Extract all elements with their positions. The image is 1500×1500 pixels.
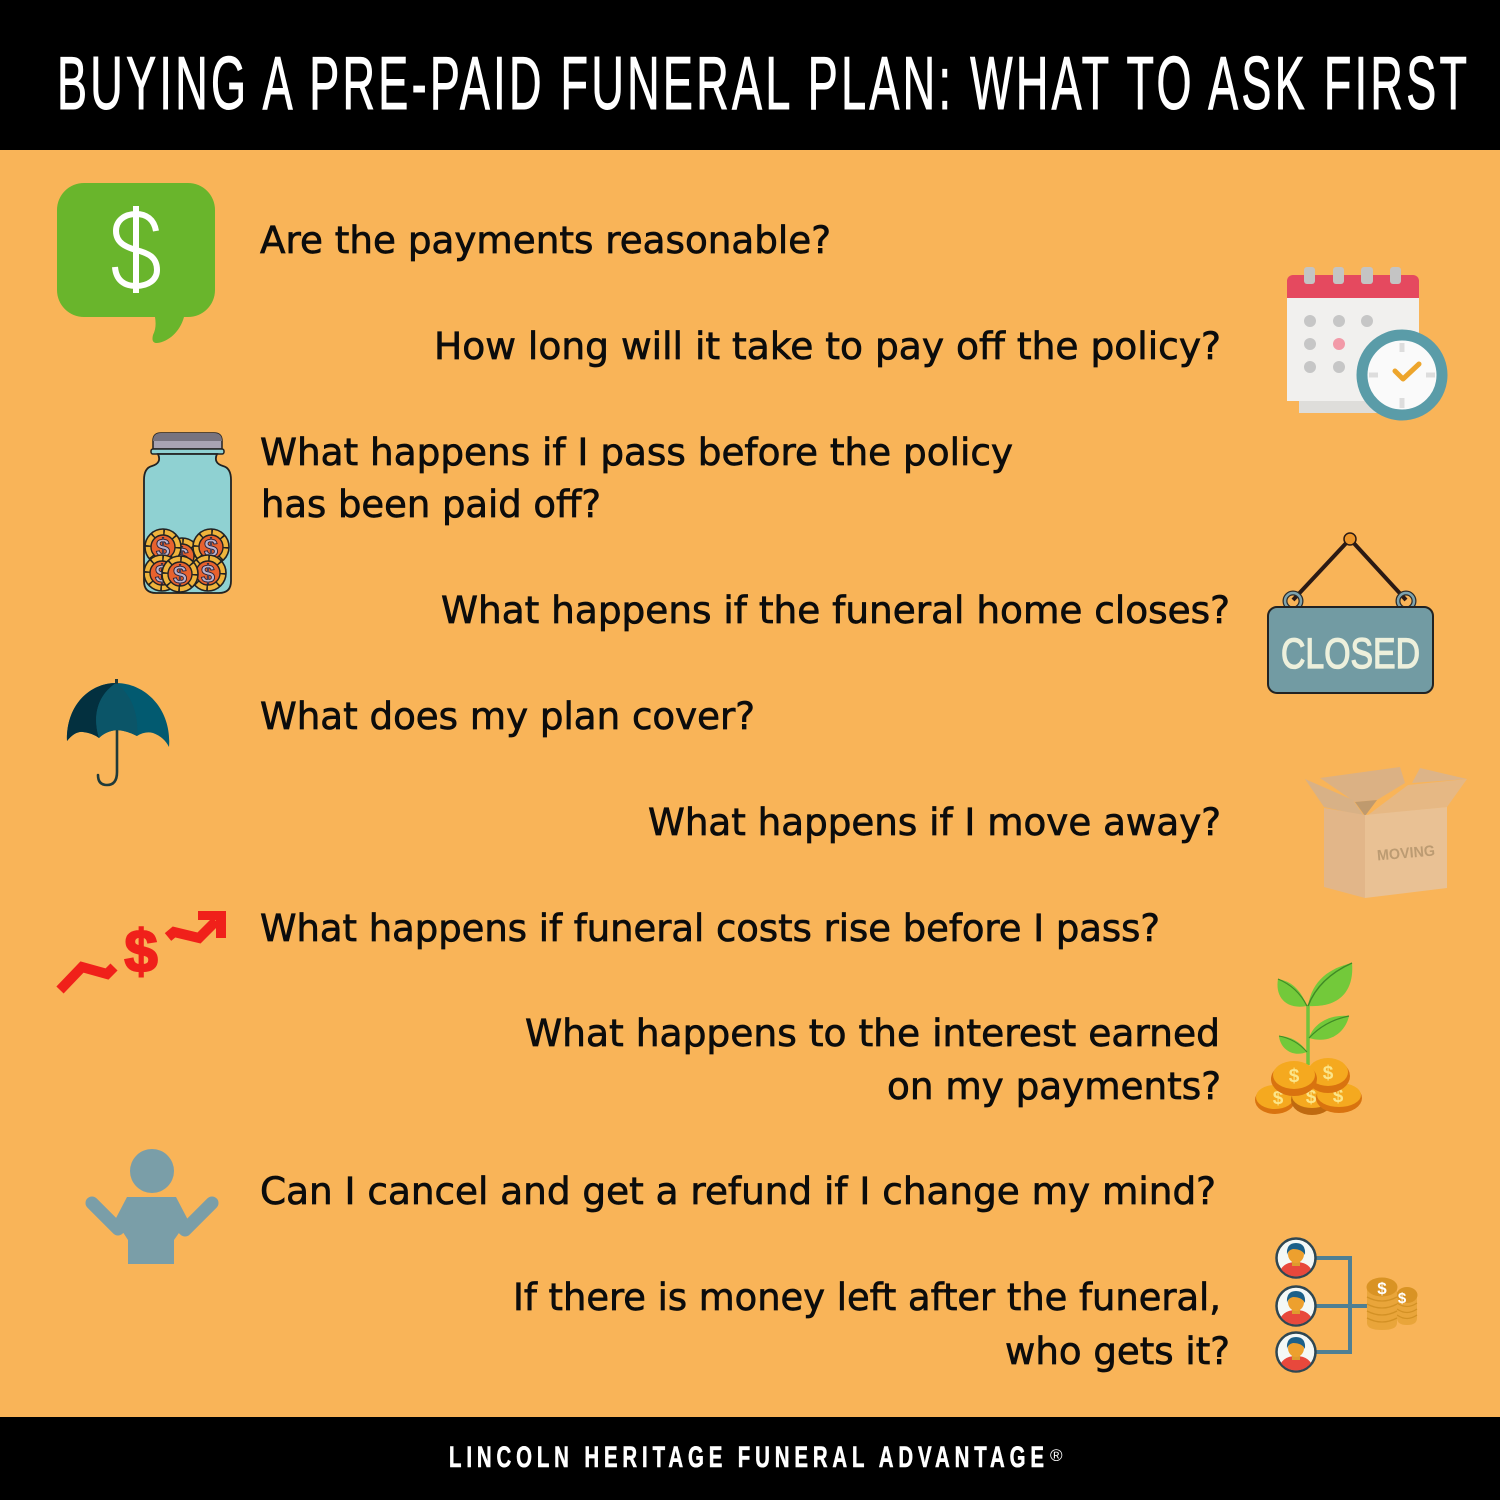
icon: moving box: MOVING (1376, 843, 1436, 864)
icon: plant growing from coins: $ (1273, 1088, 1284, 1109)
question: plan cover: What does my plan cover? (260, 695, 755, 738)
question: move away: What happens if I move away? (648, 801, 1221, 844)
header band with title (0, 0, 1500, 150)
icon: plant growing from coins: $ (1306, 1087, 1317, 1108)
icon: closed sign: CLOSED (1281, 630, 1420, 678)
question: interest earned (525, 1012, 1221, 1108)
icon: shrugging person (92, 1149, 212, 1264)
icon: rising cost arrow with dollar: $ (124, 918, 158, 985)
icon: moving box (1305, 767, 1467, 898)
question: money left after funeral (513, 1276, 1230, 1373)
question: how long to pay off: How long will it take to pay off the policy? (434, 325, 1221, 368)
question: payments reasonable: Are the payments reasonable? (260, 219, 831, 262)
icon: green speech bubble with dollar sign (57, 183, 215, 343)
icon: calendar with clock (1287, 267, 1442, 415)
question: pass before paid off: What happens if I pass before the policy (260, 431, 1013, 474)
question: money left after funeral: If there is money left after the funeral, (513, 1276, 1221, 1319)
icon: jar of dollar coins: $ (175, 543, 189, 571)
icon: plant growing from coins: $ (1323, 1063, 1334, 1084)
icon: rising cost arrow with dollar (60, 911, 226, 990)
icon: beneficiaries connected to money: $ (1377, 1279, 1387, 1298)
icon: closed sign (1268, 533, 1433, 693)
icon: jar of dollar coins: $ (155, 560, 169, 588)
icon: plant growing from coins (1255, 963, 1362, 1115)
icon: umbrella (67, 679, 169, 785)
question: cancel and refund: Can I cancel and get a refund if I change my mind? (260, 1170, 1216, 1213)
header band with title: BUYING A PRE-PAID FUNERAL PLAN: WHAT TO ASK FIRST (57, 42, 1467, 126)
question: interest earned: on my payments? (887, 1065, 1221, 1108)
icon: jar of dollar coins (144, 433, 231, 593)
icon: plant growing from coins: $ (1289, 1066, 1300, 1087)
icon: jar of dollar coins: $ (204, 534, 218, 562)
question: interest earned: What happens to the interest earned (525, 1012, 1220, 1055)
icon: beneficiaries connected to money (1276, 1238, 1418, 1372)
question: pass before paid off (260, 431, 1013, 526)
footer band with brand: LINCOLN HERITAGE FUNERAL ADVANTAGE (449, 1441, 1044, 1474)
question: funeral home closes: What happens if the funeral home closes? (441, 589, 1230, 632)
question: pass before paid off: has been paid off? (261, 483, 601, 526)
icon: jar of dollar coins: $ (156, 534, 170, 562)
icon: jar of dollar coins: $ (173, 561, 187, 589)
icon: plant growing from coins: $ (1333, 1086, 1344, 1107)
footer band with brand (0, 1417, 1500, 1500)
footer band with brand: ® (1050, 1446, 1063, 1465)
icon: jar of dollar coins: $ (201, 560, 215, 588)
question: money left after funeral: who gets it? (1005, 1330, 1230, 1373)
icon: beneficiaries connected to money: $ (1398, 1290, 1407, 1307)
question: costs rise: What happens if funeral costs rise before I pass? (260, 907, 1160, 950)
